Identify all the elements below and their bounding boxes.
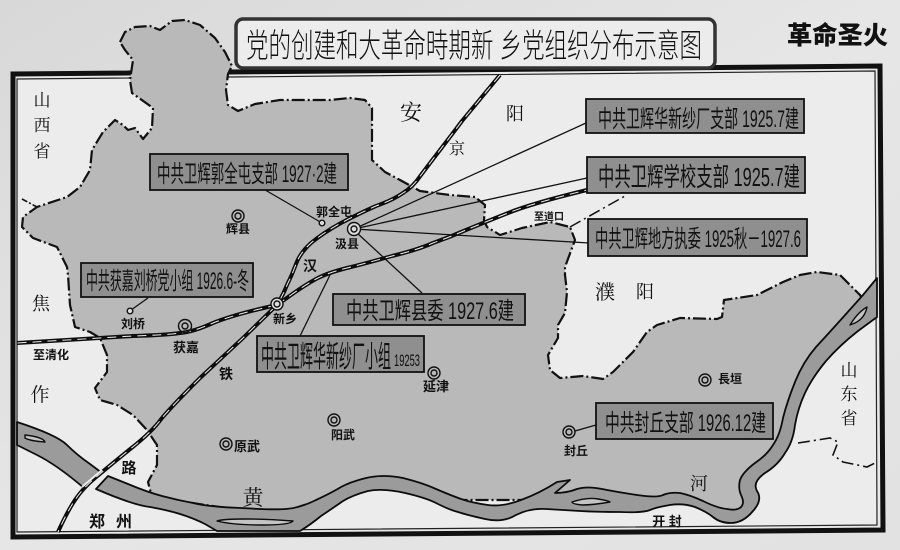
railway: to Qinghua <box>17 305 277 343</box>
callout: Weihui school branch <box>587 157 805 193</box>
place labels: 获嘉 <box>173 340 199 355</box>
Yellow River <box>17 278 877 531</box>
county markers <box>127 210 711 450</box>
callout: Huaxin mill group: 中共卫辉华新纱厂小组 <box>261 341 391 374</box>
place labels: 辉县 <box>226 222 250 236</box>
place labels: 路 <box>121 459 137 477</box>
place labels: 安 <box>400 100 422 125</box>
place labels: 河 <box>690 474 708 494</box>
place labels: 阳武 <box>331 428 355 442</box>
river islands <box>25 307 867 525</box>
callout: Liuqiao group: 中共获嘉刘桥党小组 1926.6-冬 <box>86 268 249 295</box>
callout: Weihui county committee <box>333 294 525 325</box>
callout: Huaxin mill branch <box>586 99 804 133</box>
place labels: 东 <box>840 385 858 404</box>
place labels: 州 <box>116 514 132 531</box>
callout: Liuqiao group <box>81 263 253 297</box>
place labels: 至清化 <box>33 347 69 362</box>
place labels: 至道口 <box>534 210 564 223</box>
place labels: 刘桥 <box>121 316 145 331</box>
railway: Beijing-Hankou <box>58 75 500 532</box>
title box <box>236 19 715 68</box>
place labels: 省 <box>840 409 858 428</box>
place labels: 山 <box>840 361 858 380</box>
callout: Fengqiu branch <box>596 403 773 439</box>
place labels: 汉 <box>303 258 317 274</box>
callout: Weihui county committee: 中共卫辉县委 1927.6建 <box>346 298 514 325</box>
place labels: 封丘 <box>564 443 588 458</box>
dashed line to Daokou <box>570 196 625 227</box>
dashed boundary: Shandong <box>798 438 875 467</box>
place labels: 西 <box>34 116 50 135</box>
place labels: 黄 <box>242 486 264 510</box>
title box: 党的创建和大革命時期新 乡党组织分布示意图 <box>246 27 702 64</box>
place labels: 郑 <box>89 513 105 531</box>
place labels: 汲县 <box>335 237 359 251</box>
place labels: 焦 <box>32 294 51 314</box>
railway bridge <box>82 470 106 491</box>
place labels: 郭全屯 <box>316 204 352 219</box>
place labels <box>30 91 858 531</box>
place labels: 山 <box>34 91 50 110</box>
place labels: 長垣 <box>718 372 742 386</box>
corner heading: 革命圣火 <box>787 21 888 50</box>
place labels: 延津 <box>423 379 449 394</box>
callout: Huaxin mill group <box>257 336 424 374</box>
leader lines <box>131 123 596 431</box>
place labels: 阳 <box>636 282 654 302</box>
callout: Fengqiu branch: 中共封丘支部 1926.12建 <box>605 410 766 437</box>
callout: Huaxin mill group: 19253 <box>394 351 420 370</box>
callout: Weihui local committee <box>588 219 807 256</box>
place labels: 阳 <box>506 104 524 124</box>
place labels: 濮 <box>595 281 615 304</box>
place labels: 京 <box>449 140 465 158</box>
place labels: 作 <box>30 384 50 406</box>
place labels: 原武 <box>234 439 260 454</box>
place labels: 铁 <box>219 366 233 382</box>
railway: to Daokou <box>277 190 587 305</box>
place labels: 开 封 <box>652 514 682 529</box>
callout: Guoquantun branch: 中共卫辉郭全屯支部 1927·2建 <box>157 161 337 188</box>
place labels: 新乡 <box>273 311 297 326</box>
boundary spur <box>22 199 37 207</box>
callout: Guoquantun branch <box>150 154 348 190</box>
place labels: 省 <box>34 142 50 161</box>
